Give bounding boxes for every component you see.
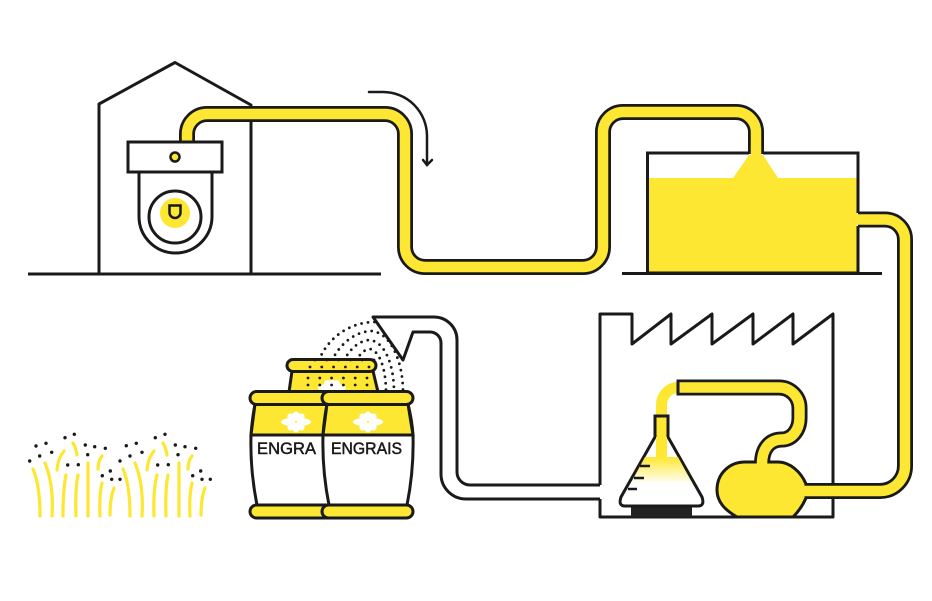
left bag label band bbox=[251, 404, 341, 435]
flush button bbox=[170, 152, 180, 162]
flask burner bbox=[631, 506, 692, 517]
house outline bbox=[99, 62, 251, 274]
tank walls bbox=[648, 153, 858, 273]
right bag flower bbox=[353, 411, 383, 433]
ground line: tank bbox=[622, 272, 882, 275]
toilet bbox=[128, 142, 222, 253]
right bag label band bbox=[323, 404, 413, 435]
left bag body bbox=[251, 404, 341, 505]
flask bbox=[620, 388, 703, 506]
toilet cistern bbox=[128, 142, 222, 172]
right bag bottom rim bbox=[322, 505, 413, 518]
back bag body bbox=[289, 371, 378, 392]
fertilizer dots over back bag bbox=[308, 360, 378, 385]
boiler vessel bbox=[717, 462, 806, 517]
distillate stream bbox=[662, 388, 678, 457]
wheat field bbox=[28, 433, 212, 516]
wheat seeds bbox=[28, 433, 212, 481]
tank liquid bbox=[648, 155, 857, 272]
drain bbox=[170, 206, 180, 218]
right fertilizer bag bbox=[322, 392, 413, 518]
back fertilizer bag bbox=[287, 360, 378, 399]
toilet bowl bbox=[139, 172, 212, 253]
wheat stalks bbox=[33, 443, 205, 516]
fertilizer spray arcs bbox=[313, 322, 403, 392]
pipe fills bbox=[680, 220, 905, 491]
left bag top rim bbox=[250, 392, 341, 404]
right bag top rim bbox=[322, 392, 413, 404]
toilet seat ring bbox=[149, 191, 201, 243]
back bag rim bbox=[287, 360, 376, 372]
pipe: tank to boiler bbox=[678, 220, 905, 491]
flask ticks bbox=[628, 466, 650, 489]
storage tank bbox=[648, 153, 858, 273]
back bag flower bbox=[318, 377, 346, 399]
ground line: house bbox=[28, 272, 381, 276]
left fertilizer bag bbox=[250, 392, 341, 518]
flow direction arrow bbox=[369, 92, 432, 165]
left bag bottom rim bbox=[250, 505, 341, 518]
left bag text: ENGRA bbox=[257, 440, 316, 458]
right bag body bbox=[323, 404, 413, 505]
tube end cap bbox=[676, 380, 680, 396]
flask neck outline bbox=[655, 416, 668, 437]
white pipe with spreader funnel bbox=[373, 317, 600, 499]
flask glass bbox=[620, 416, 703, 506]
yellow water bbox=[160, 198, 190, 228]
pipe: toilet to tank bbox=[187, 112, 756, 267]
right bag text: ENGRAIS bbox=[331, 440, 402, 458]
factory building bbox=[600, 314, 833, 517]
left bag flower bbox=[281, 411, 311, 433]
